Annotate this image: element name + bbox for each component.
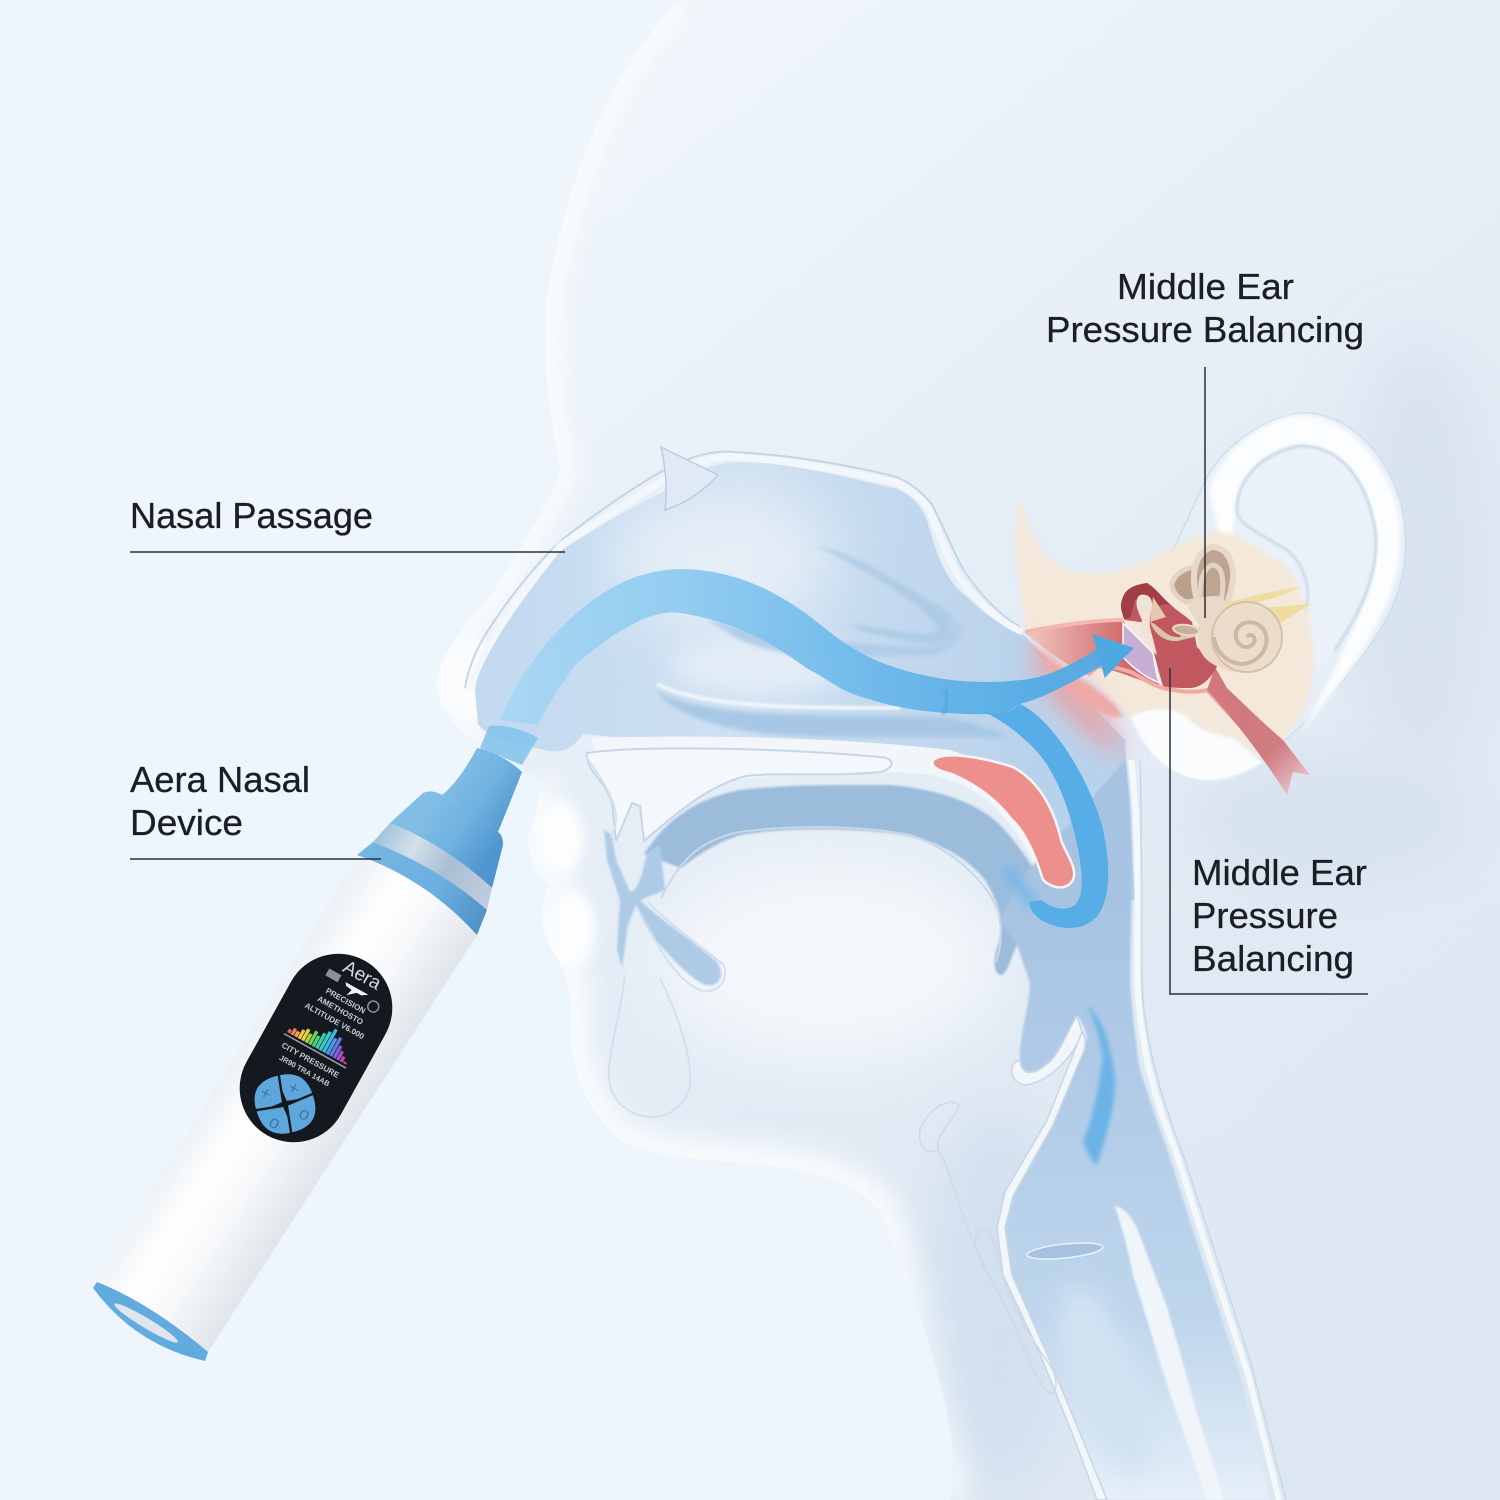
throat airflow (1083, 1006, 1115, 1165)
label: middle ear pressure balancing bottom (1170, 668, 1368, 994)
tongue outline (661, 827, 1001, 962)
lobe (1130, 708, 1262, 780)
epiglottis crescent (1012, 1016, 1082, 1085)
blush under canal (1027, 640, 1123, 717)
pharynx and trachea (920, 760, 1286, 1500)
mouth structures (585, 755, 725, 1117)
left semicircular canal (1172, 567, 1200, 602)
plane icon (340, 982, 368, 1004)
canal bottom edge (1088, 667, 1283, 770)
footer line 2: JR90 TRA 14AB (278, 1053, 332, 1089)
tongue droplet (609, 975, 690, 1117)
buttons (241, 1060, 329, 1148)
lower turbinate (657, 692, 1010, 738)
nasal cavity (465, 447, 1135, 905)
canal top edge (1025, 620, 1123, 632)
head shading (436, 0, 1490, 1500)
vestibule (1188, 596, 1250, 673)
status icon (366, 999, 381, 1014)
nose cartilage (661, 447, 718, 510)
oral arch (644, 785, 1065, 975)
label: middle ear pressure balancing bottom: Balancing (1192, 938, 1354, 979)
neck outline (1140, 760, 1286, 1500)
buttons: o (295, 1103, 314, 1125)
nerves (1223, 587, 1300, 609)
ear interior shade (1237, 446, 1376, 670)
cavity dark top (1121, 583, 1170, 619)
neck white edge (1131, 760, 1279, 1500)
ear anatomy (1025, 547, 1313, 795)
buttons: + (284, 1077, 303, 1100)
label: aera nasal device: Device (130, 802, 243, 843)
white wedge between airway and esophagus (1115, 1206, 1224, 1500)
main stream (500, 569, 1107, 725)
blue band (357, 842, 487, 935)
cavity outline (465, 452, 1020, 688)
trachea ring (1026, 1240, 1104, 1262)
branch fade into arch (1005, 868, 1036, 906)
label: middle ear pressure balancing bottom: Middle Ear (1192, 852, 1367, 893)
ear (1130, 413, 1406, 780)
rainbow chart (287, 1009, 359, 1065)
label: middle ear pressure balancing top: Middle Ear (1117, 266, 1294, 307)
battery icon (325, 968, 341, 982)
cavity lower pale (670, 635, 850, 695)
cochlea (1212, 602, 1282, 672)
eustachian tube (1207, 667, 1310, 795)
lower gum outline (640, 902, 725, 991)
upper turbinate (816, 546, 954, 645)
brand: Aera (339, 957, 385, 995)
device (93, 726, 538, 1361)
buttons: o (266, 1111, 284, 1134)
nerve branch (1267, 603, 1313, 624)
arrow head (1093, 635, 1133, 677)
body (97, 857, 477, 1352)
footer text: CITY PRESSURE (280, 1041, 341, 1080)
head silhouette (436, 0, 1500, 1500)
ossicles (1136, 595, 1200, 655)
device screen (220, 934, 412, 1162)
label: aera nasal device: Aera Nasal (130, 759, 310, 800)
red halo (1030, 640, 1125, 760)
turbinate highlight (657, 684, 900, 708)
canal band (1200, 565, 1223, 615)
chart axis (284, 1034, 346, 1068)
trachea pale (1039, 1274, 1171, 1486)
cavity pale centre (610, 490, 830, 630)
middle ear cavity (1121, 583, 1217, 688)
stream junction shadow (942, 690, 948, 714)
concha line (1237, 513, 1308, 640)
hard palate outline (587, 748, 892, 841)
ear canal (1025, 620, 1160, 684)
label: nasal passage: Nasal Passage (130, 495, 373, 536)
label: middle ear pressure balancing bottom: Pressure (1192, 895, 1338, 936)
readout line 2: AMETHOSTO (316, 994, 365, 1027)
readout line 3: ALTITUDE V6.000 (303, 1001, 366, 1041)
label: middle ear pressure balancing top: Pressure Balancing (1046, 309, 1364, 350)
screen pill (220, 934, 412, 1162)
grey ring (373, 823, 492, 910)
upper collar (390, 791, 503, 888)
oval window (1172, 623, 1200, 637)
white strip below cavity (590, 736, 1060, 885)
pink soft palate (934, 757, 1073, 886)
buttons: + (256, 1082, 275, 1105)
thyroid outline (920, 1102, 1056, 1394)
transparent tip (480, 726, 538, 765)
ear rim shadow (1237, 446, 1376, 650)
airway wall (997, 1032, 1107, 1500)
readout text: PRECISION (324, 986, 367, 1016)
label: middle ear pressure balancing top (1046, 266, 1364, 618)
white rim inside outline (470, 457, 1022, 690)
end cap (93, 1282, 208, 1361)
nozzle cone (442, 748, 522, 832)
helix rim (1208, 415, 1401, 735)
middle turbinate (706, 619, 962, 657)
air flow stream (500, 569, 1108, 928)
beige temporal tissue (1016, 500, 1313, 760)
lower branch (985, 704, 1108, 928)
top semicircular canal (1194, 547, 1233, 612)
label: aera nasal device (130, 759, 381, 859)
cap inner (112, 1300, 180, 1346)
eardrum (1123, 623, 1160, 683)
